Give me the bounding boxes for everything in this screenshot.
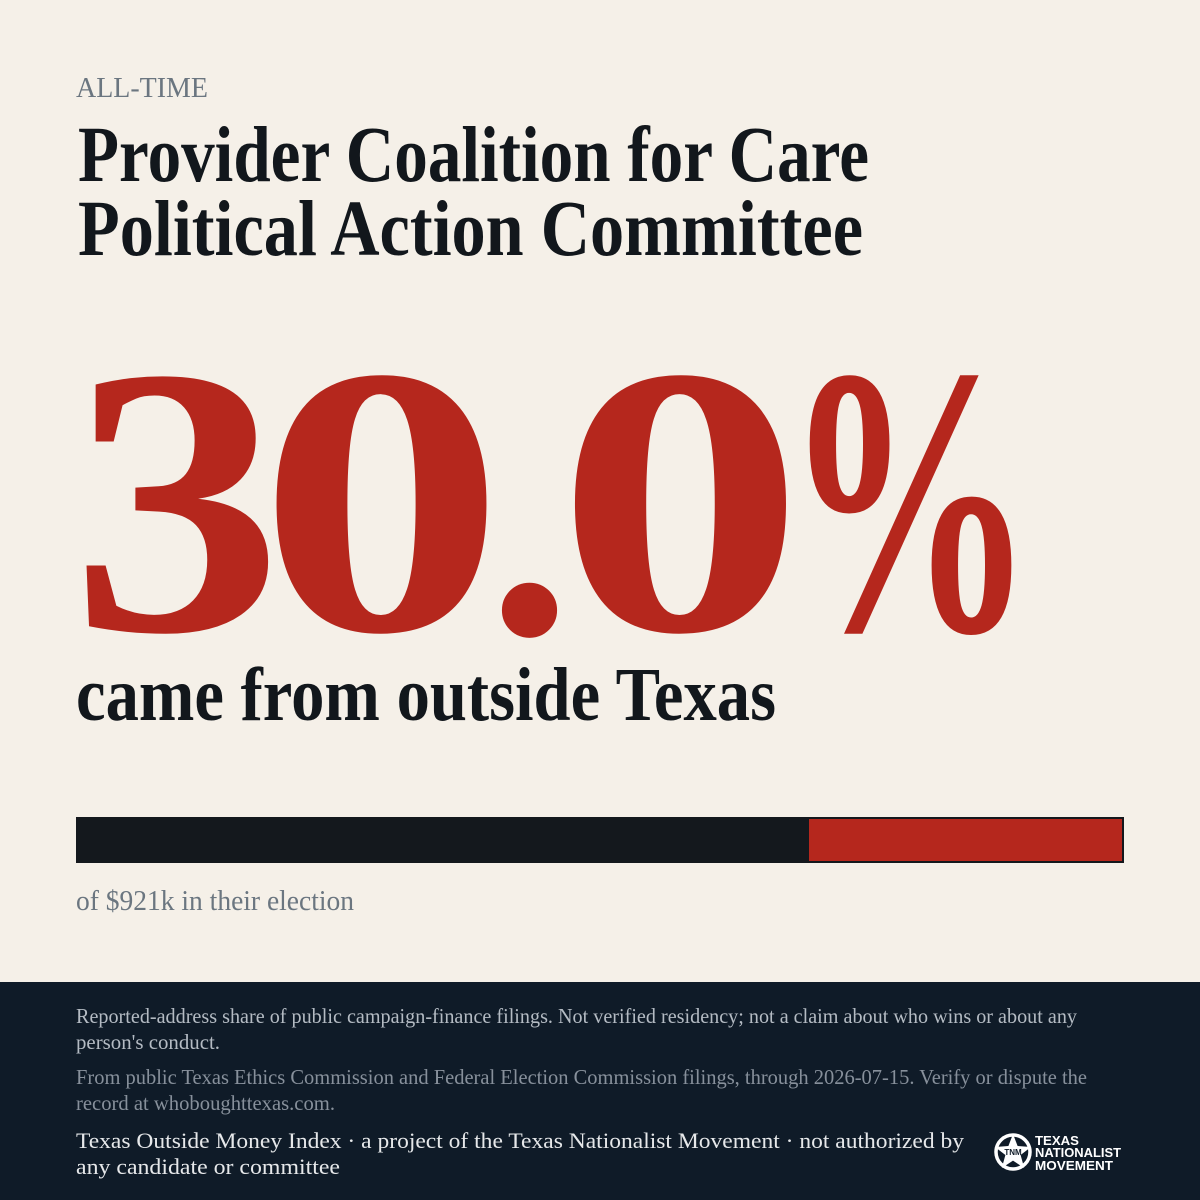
attribution: any candidate or committee	[76, 1154, 340, 1179]
title: Provider Coalition for Care	[78, 112, 869, 199]
disclaimer: person's conduct.	[76, 1030, 220, 1054]
attribution	[76, 1128, 965, 1179]
icon: star in circle: TNM	[1004, 1148, 1022, 1157]
source note: record at whoboughttexas.com.	[76, 1091, 335, 1115]
disclaimer: Reported-address share of public campaign-finance filings. Not verified residency; not a claim about who wins or about any	[76, 1004, 1077, 1028]
logo wordmark: TEXAS	[1035, 1134, 1079, 1148]
big number: 30.0%: 3	[71, 290, 283, 713]
attribution: Texas Outside Money Index · a project of the Texas Nationalist Movement · not authorized by	[76, 1128, 965, 1153]
title: Political Action Committee	[78, 186, 863, 273]
logo wordmark	[1035, 1134, 1121, 1173]
disclaimer	[76, 1004, 1077, 1054]
subheading: came from outside Texas	[76, 653, 776, 737]
logo wordmark: NATIONALIST	[1035, 1146, 1121, 1160]
source note: From public Texas Ethics Commission and Federal Election Commission filings, through 2026-07-15. Verify or dispute the	[76, 1065, 1087, 1089]
big number: 30.0%	[71, 289, 1035, 714]
logo: Texas Nationalist Movement	[995, 1134, 1121, 1173]
stacked bar	[76, 817, 1124, 863]
logo wordmark: MOVEMENT	[1035, 1159, 1113, 1173]
title	[78, 112, 869, 273]
big number: 30.0%: 0	[556, 289, 805, 714]
bar caption: of $921k in their election	[76, 885, 354, 917]
big number: 30.0%: %	[784, 290, 1035, 714]
big number: 30.0%: 0	[258, 289, 505, 713]
eyebrow: all-time: ALL-TIME	[76, 73, 208, 104]
source note	[76, 1065, 1087, 1115]
footer panel	[0, 982, 1200, 1200]
big number: 30.0%: .	[487, 330, 572, 707]
